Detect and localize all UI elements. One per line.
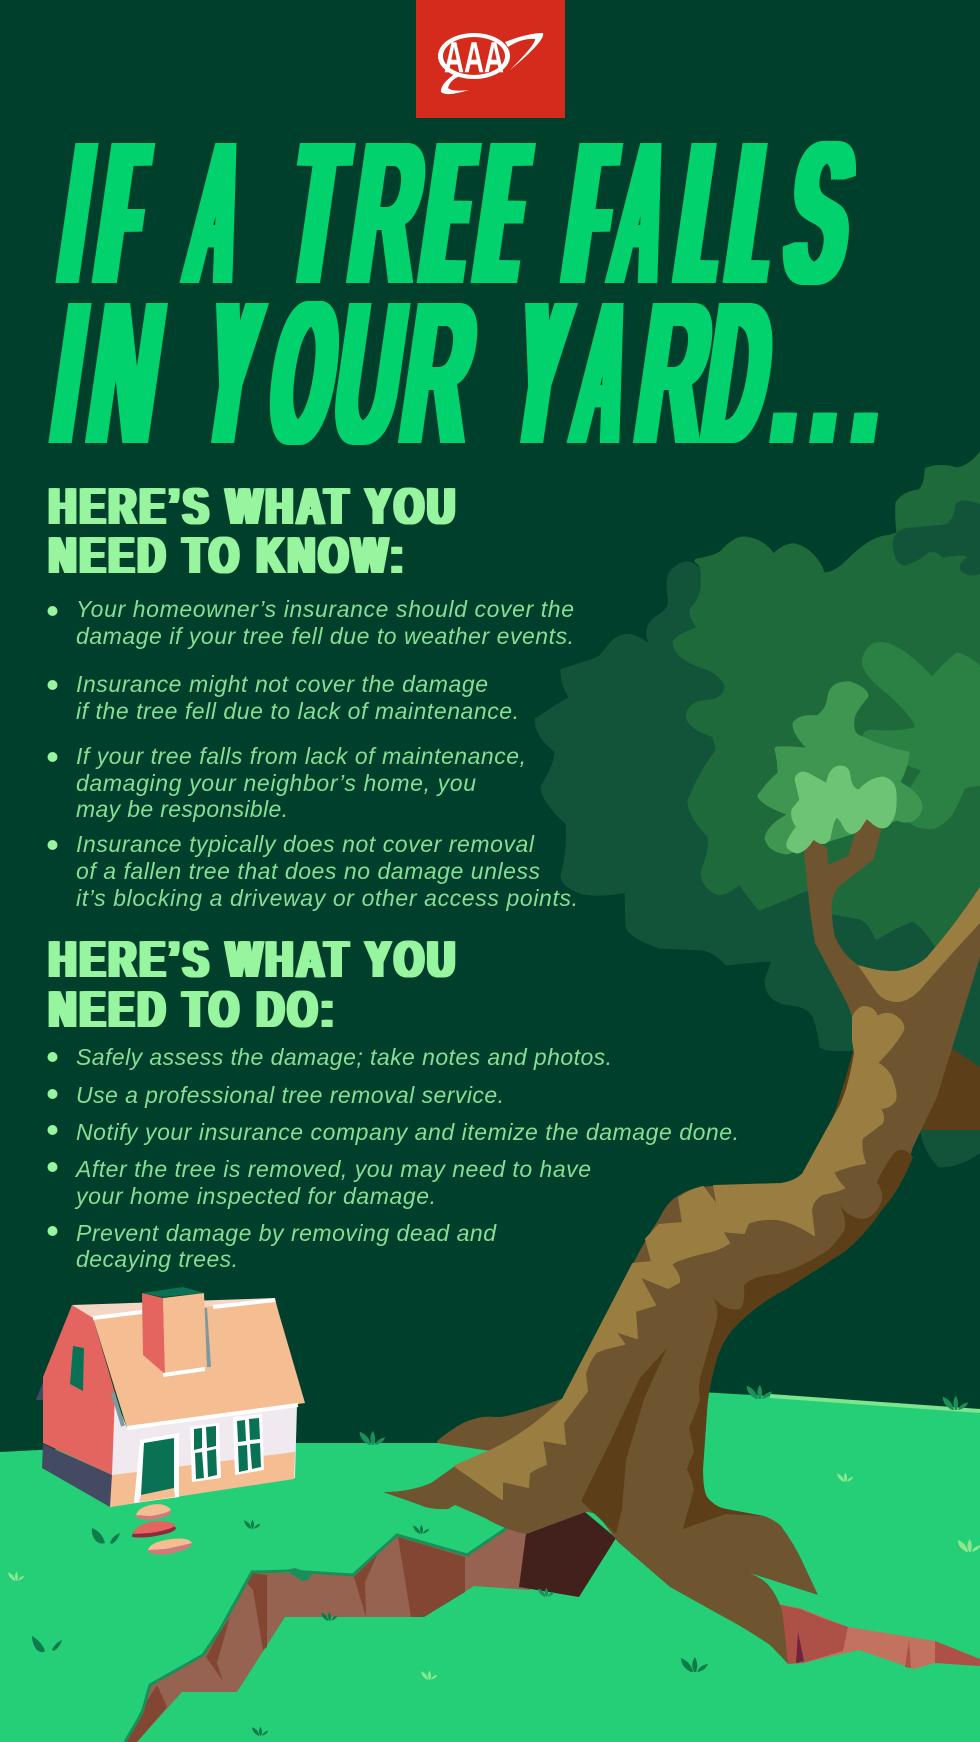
bullet list: what you need to do: Safely assess the damage; take notes and photos. [76,1044,612,1070]
bullet list: what you need to know: Insurance typically does not cover removal [76,831,535,857]
root: back left root [437,1399,561,1470]
tree canopy [537,453,980,1165]
crack: left ground crack [125,1512,616,1742]
title line 1: S [775,100,866,327]
title line 1: A [177,100,255,327]
bullet list: what you need to know: if the tree fell due to lack of maintenance. [76,698,519,724]
title line 2: R [391,260,488,487]
house: chimney [142,1287,207,1375]
title line 2: O [259,260,350,487]
grass: left ground [0,1443,700,1742]
bullet list: what you need to know: may be responsible. [76,796,288,822]
title line 2 [42,260,900,487]
title line 2: N [78,260,175,487]
title line 1: E [416,100,482,327]
bullet list: what you need to do: Use a professional tree removal service. [76,1082,504,1108]
crack: right ground crack [777,1604,980,1669]
canopy: middle foliage [675,453,980,946]
title line 1: A [602,100,680,327]
house: roof edge [93,1300,275,1318]
house: corner trim [113,1308,209,1426]
heading: need to know line 2: NEED TO KNOW: [49,527,407,585]
canopy: lighter lobe [760,684,920,852]
title line 2: Y [505,260,578,487]
canopy: green lobe [864,645,980,827]
canopy: back foliage [537,564,980,1165]
title line 1: F [559,100,622,327]
bullet list: what you need to know: Your homeowner’s insurance should cover the [76,596,574,622]
house: door [134,1433,179,1503]
branch: dark right limb [915,1047,980,1130]
bullet list: what you need to do: decaying trees. [76,1246,238,1272]
heading: what you need to do: HERE’S WHAT YOU [49,931,459,989]
house: far gable tip [36,1382,43,1400]
house [36,1287,305,1507]
house: foundation [42,1444,112,1507]
title line 2: I [42,260,98,487]
house: side window [70,1346,84,1391]
heading: what you need to know: HERE’S WHAT YOU [49,478,459,536]
bullet list: what you need to do [48,1044,739,1272]
heading: need to do line 2: NEED TO DO: [49,981,337,1039]
title line 1: F [91,100,154,327]
title line 2: . [844,260,900,487]
title line 2: . [803,260,859,487]
title line 2: . [763,260,819,487]
title line 1: T [280,100,356,327]
title line 2: Y [196,260,269,487]
trunk: light bark patch [455,1007,903,1499]
title line 1: I [49,100,105,327]
title line 2: R [626,260,723,487]
logo: AAA oval [438,33,510,82]
logo badge [416,0,565,118]
logo: AAA oval: AAA [444,33,504,82]
house: lower wall [110,1452,295,1507]
bullet list: what you need to do: your home inspected for damage. [74,1183,436,1209]
title line 2: D [693,260,784,487]
canopy: lightest leaf cluster [789,768,894,851]
bullet list: what you need to do: Prevent damage by removing dead and [76,1220,497,1246]
trunk: central dark wedge [581,1348,667,1534]
tree trunk [383,816,980,1664]
title line 1: E [470,100,536,327]
canopy: dark upper lobe [895,503,980,573]
bullet list: what you need to know: damaging your neighbor’s home, you [76,770,476,796]
grass: right ground [400,1392,980,1742]
bullet list: what you need to know: damage if your tree fell due to weather events. [76,623,574,649]
title line 1 [49,100,866,327]
title line 2: A [564,260,642,487]
house: roof [93,1300,305,1428]
tufts of grass [8,1385,980,1736]
house: window right [233,1414,264,1475]
logo: swoosh [441,33,543,94]
trunk: dark shading right [683,1150,913,1529]
title line 1: R [339,100,436,327]
grass: highlight edge [770,1396,980,1411]
bullet list: what you need to know: it’s blocking a driveway or other access points. [76,885,578,911]
stepping stones [132,1504,192,1555]
title line 1: L [671,100,734,327]
bullet list: what you need to know: If your tree falls from lack of maintenance, [76,743,526,769]
house: window left [190,1423,221,1482]
trunk: main shape [383,816,980,1664]
house: side wall [43,1305,115,1475]
trunk: dark notch [830,1030,867,1127]
title line 2: U [323,260,417,487]
bullet list: what you need to know [48,596,578,911]
bullet list: what you need to do: After the tree is removed, you may need to have [74,1156,591,1182]
house: front wall [110,1393,297,1507]
bullet list: what you need to know: of a fallen tree that does no damage unless [76,858,540,884]
house: eave [127,1405,298,1428]
house: roof back [72,1298,280,1322]
bullet list: what you need to know: Insurance might not cover the damage [76,671,488,697]
title line 1: L [722,100,785,327]
trunk: light upper band [858,887,980,1002]
bullet list: what you need to do: Notify your insurance company and itemize the damage done. [76,1119,739,1145]
